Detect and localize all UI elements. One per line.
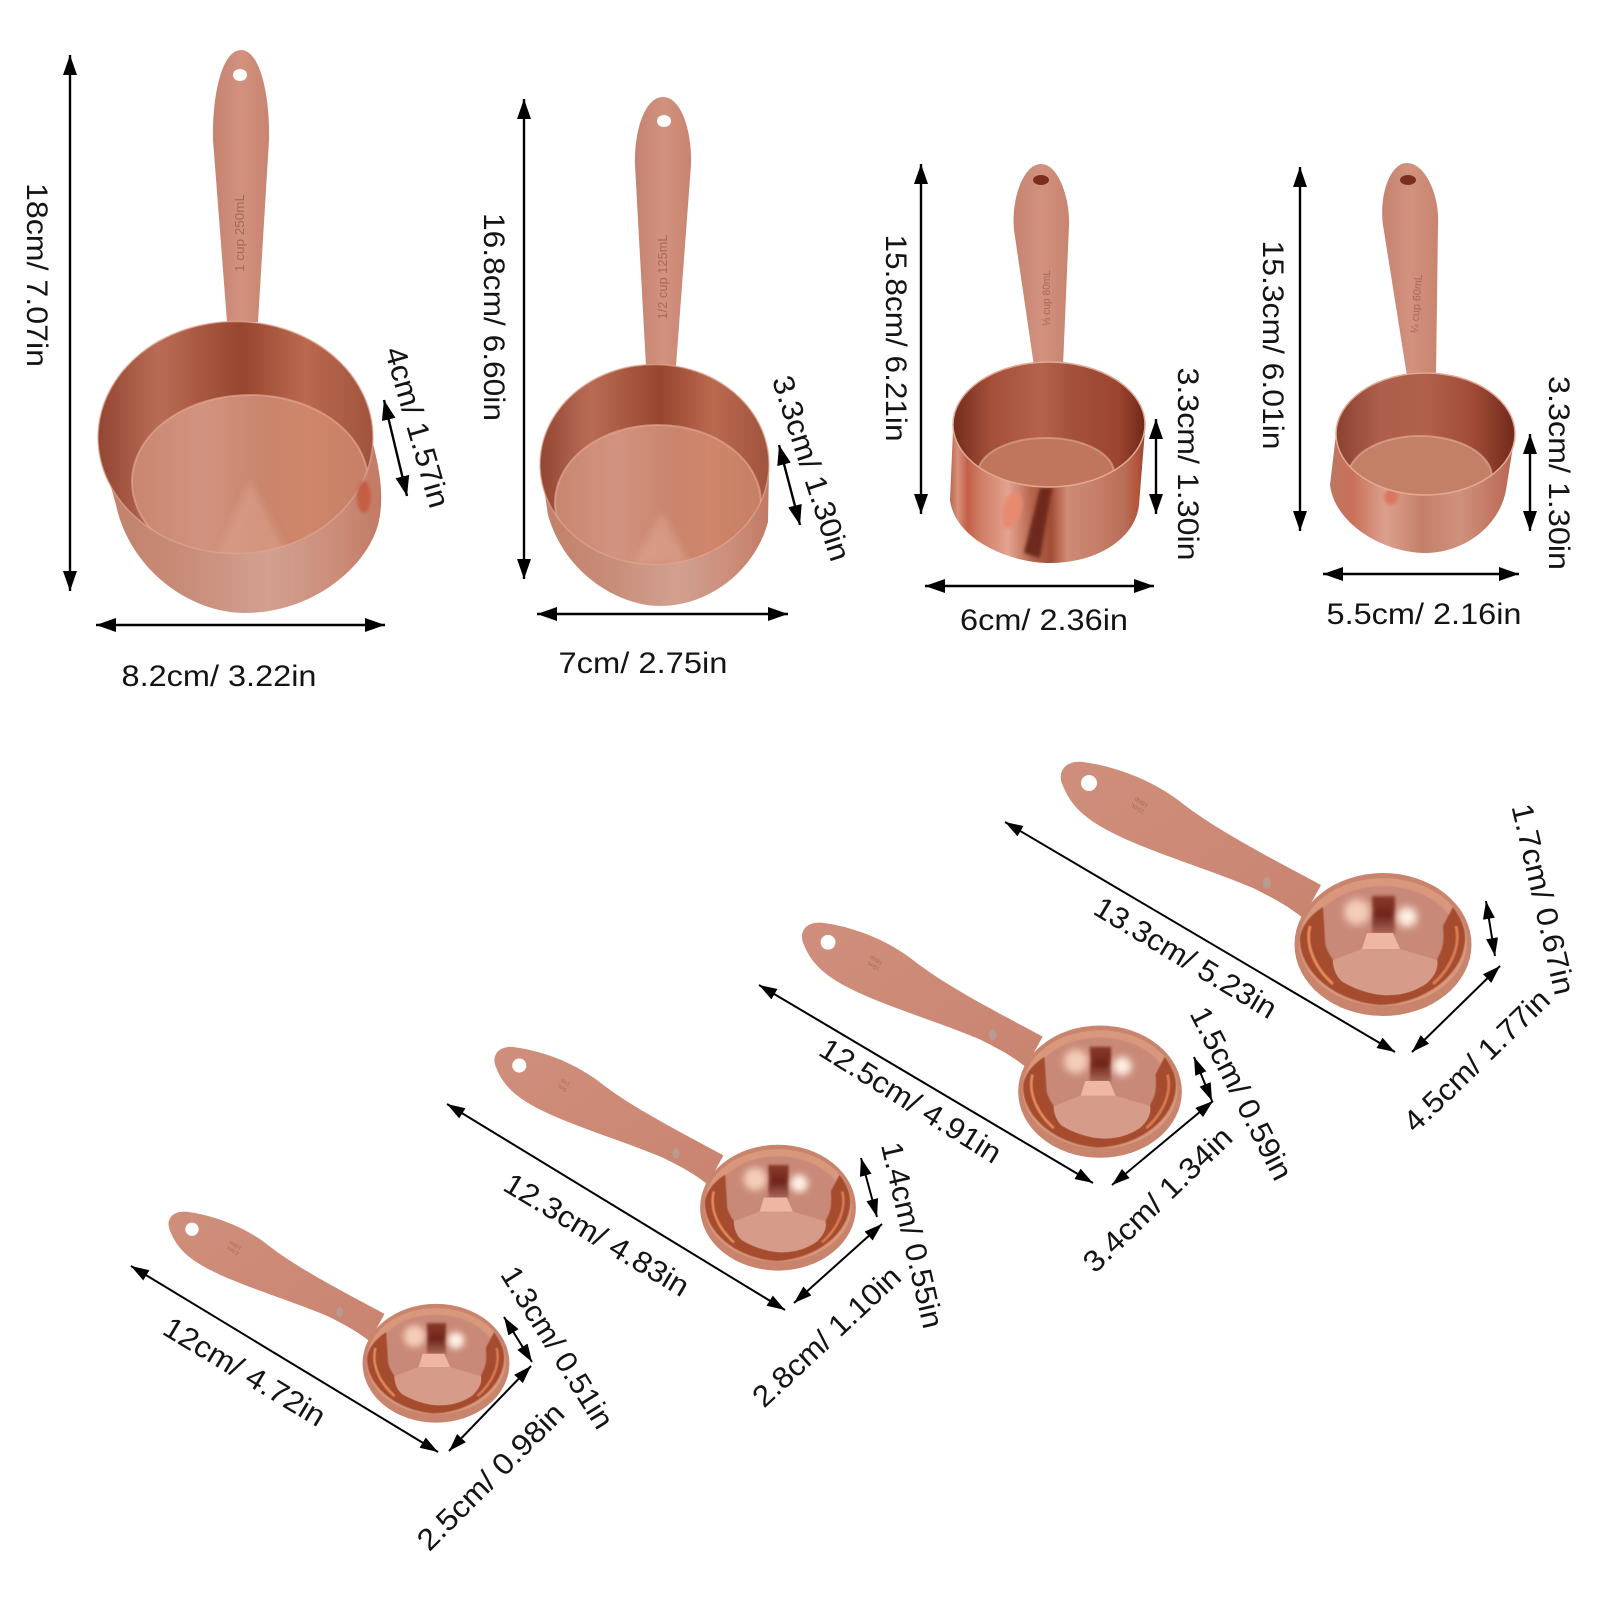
cup 4 body reflection — [1384, 489, 1398, 505]
spoon 3 bowl — [1018, 1025, 1182, 1158]
cup 1 depth arrow — [384, 400, 407, 496]
cup 4 depth arrow — [1529, 434, 1531, 531]
spoon 4 length arrow — [1005, 822, 1395, 1052]
cup 3 body — [950, 430, 1145, 563]
measuring cup 2 — [540, 97, 770, 606]
spoon 4 depth label: 1.7cm/ 0.67in — [1505, 801, 1581, 998]
cup 3 inner wall — [954, 362, 1144, 470]
spoon 3 length arrow — [759, 985, 1093, 1183]
cup 2 body — [541, 468, 769, 606]
cup 4 width arrow — [1323, 573, 1519, 575]
spoon 4 engraving — [1129, 795, 1150, 814]
cup 2 height label: 16.8cm/ 6.60in — [477, 213, 510, 421]
spoon 1 engraving: 2.5mL — [225, 1244, 240, 1256]
cup 1 width label: 8.2cm/ 3.22in — [122, 660, 316, 693]
spoon 2 depth label: 1.4cm/ 0.55in — [874, 1139, 949, 1332]
cup 1 interior — [98, 320, 374, 569]
cup 3 depth label: 3.3cm/ 1.30in — [1171, 368, 1204, 560]
cup 2 floor sheen — [637, 516, 688, 564]
cup 1 rim — [98, 322, 373, 554]
spoon 2 engraving: 1tsp — [560, 1077, 571, 1087]
spoon 2 bowl — [700, 1145, 856, 1271]
spoon 2 rivet mark — [672, 1148, 679, 1159]
cup 1 height arrow — [69, 55, 71, 591]
cup 2 inner wall — [540, 364, 769, 514]
measuring cup 3 — [950, 164, 1148, 563]
spoon 3 engraving: 1tbsp — [869, 954, 884, 966]
spoon 1 length arrow — [131, 1266, 438, 1452]
spoon 4 handle — [1061, 762, 1321, 918]
cup 2 width arrow — [537, 613, 788, 615]
spoon 4 width label: 4.5cm/ 1.77in — [1397, 983, 1557, 1139]
measuring spoon 2 — [494, 1047, 856, 1271]
cup 2 depth arrow — [779, 445, 800, 525]
cup 2 height arrow — [523, 99, 525, 579]
cup 3 height label: 15.8cm/ 6.21in — [879, 234, 912, 442]
cup 4 engraving: ¼ cup 60mL — [1409, 274, 1425, 334]
cup 1 width arrow — [96, 624, 385, 626]
cup 4 interior — [1336, 374, 1514, 494]
spoon 4 engraving: 1tbsp — [1133, 795, 1149, 808]
spoon 2 handle — [494, 1047, 723, 1184]
spoon 4 bowl — [1294, 873, 1472, 1016]
cup 3 handle — [1014, 164, 1069, 366]
spoon 1 depth arrow — [504, 1317, 532, 1362]
cup 2 handle hole — [657, 115, 671, 127]
spoon 3 depth arrow — [1194, 1057, 1212, 1101]
cup 4 handle hole — [1400, 175, 1416, 185]
spoon 2 length arrow — [447, 1104, 785, 1310]
spoon 1 handle hole — [185, 1223, 199, 1236]
cup 1 height label: 18cm/ 7.07in — [20, 183, 53, 367]
spoon 4 length label: 13.3cm/ 5.23in — [1088, 891, 1282, 1026]
spoon 2 length label: 12.3cm/ 4.83in — [498, 1167, 695, 1304]
spoon 1 handle — [169, 1212, 385, 1341]
cup 3 height arrow — [920, 164, 922, 514]
cup 1 body — [98, 440, 381, 613]
spoon 2 width label: 2.8cm/ 1.10in — [746, 1260, 908, 1414]
measuring spoon 3 — [802, 923, 1182, 1158]
cup 2 interior — [540, 362, 770, 581]
cup 3 width arrow — [925, 585, 1154, 587]
spoon 2 handle hole — [512, 1059, 526, 1073]
cup 3 body reflection — [998, 489, 1026, 531]
spoon 4 engraving: 15mL — [1129, 801, 1146, 814]
spoon 1 engraving: 1/2tsp — [228, 1239, 243, 1251]
cup 3 rim — [953, 362, 1145, 487]
cup 4 floor — [1350, 435, 1493, 494]
cup 3 floor — [978, 437, 1114, 486]
cup 2 floor — [555, 425, 761, 581]
cup 2 engraving: 1/2 cup 125mL — [655, 234, 670, 320]
spoon 1 width label: 2.5cm/ 0.98in — [411, 1397, 571, 1557]
spoon 2 depth arrow — [861, 1158, 877, 1217]
cup 3 body dark streak — [1024, 488, 1052, 558]
spoon 3 engraving: 15mL — [866, 959, 881, 971]
cup 1 inner wall — [98, 322, 373, 526]
cup 4 body — [1330, 434, 1515, 553]
spoon 3 handle hole — [821, 935, 835, 950]
spoon 4 handle hole — [1081, 775, 1097, 791]
cup 1 handle hole — [233, 69, 247, 81]
cup 2 handle — [635, 97, 691, 366]
cup 4 rim — [1336, 373, 1515, 495]
cup 3 engraving: ⅓ cup 80mL — [1041, 270, 1053, 326]
cup 1 engraving: 1 cup 250mL — [232, 194, 247, 272]
measuring spoon 4 (largest) — [1061, 762, 1472, 1016]
measuring cup 1 — [98, 50, 381, 613]
spoon 3 engraving — [866, 953, 884, 971]
cup 2 width label: 7cm/ 2.75in — [558, 647, 728, 680]
spoon 3 width arrow — [1112, 1101, 1213, 1185]
spoon 1 engraving — [225, 1239, 243, 1256]
cup 3 depth arrow — [1155, 419, 1157, 514]
cup 3 handle hole — [1033, 175, 1049, 185]
spoon 1 width arrow — [449, 1366, 531, 1451]
cup 4 height arrow — [1299, 167, 1301, 531]
spoon 4 width arrow — [1412, 966, 1500, 1052]
cup 1 handle — [213, 50, 269, 322]
spoon 1 depth label: 1.3cm/ 0.51in — [494, 1261, 620, 1435]
spoon 1 bowl — [363, 1304, 509, 1423]
cup 3 interior — [954, 362, 1144, 486]
spoon 3 rivet mark — [989, 1029, 996, 1040]
cup 4 depth label: 3.3cm/ 1.30in — [1542, 376, 1575, 570]
cup 2 rim — [540, 364, 769, 564]
cup 1 floor — [132, 395, 368, 569]
cup 1 depth label: 4cm/ 1.57in — [378, 343, 455, 512]
cup 4 width label: 5.5cm/ 2.16in — [1326, 598, 1522, 631]
cup 4 handle — [1382, 163, 1438, 376]
cup 4 inner wall — [1336, 374, 1514, 474]
spoon 1 length label: 12cm/ 4.72in — [157, 1311, 331, 1434]
cup 4 height label: 15.3cm/ 6.01in — [1256, 240, 1289, 450]
spoon 2 engraving — [556, 1077, 571, 1093]
spoon 4 depth arrow — [1486, 901, 1495, 956]
measuring cup 4 — [1330, 163, 1518, 553]
cup 3 width label: 6cm/ 2.36in — [960, 604, 1128, 637]
spoon 4 rivet mark — [1263, 877, 1271, 889]
spoon 2 engraving: 5mL — [556, 1082, 568, 1093]
cup 2 depth label: 3.3cm/ 1.30in — [765, 372, 856, 565]
cup 1 floor sheen — [221, 486, 284, 553]
measuring spoon 1 (smallest) — [169, 1212, 509, 1423]
cup 1 side reflection — [357, 481, 371, 513]
spoon 3 width label: 3.4cm/ 1.34in — [1077, 1121, 1239, 1279]
spoon 3 depth label: 1.5cm/ 0.59in — [1183, 1002, 1298, 1186]
spoon 3 handle — [802, 923, 1043, 1067]
spoon 3 length label: 12.5cm/ 4.91in — [813, 1032, 1007, 1170]
spoon 2 width arrow — [794, 1224, 882, 1303]
spoon 1 rivet mark — [336, 1307, 343, 1317]
